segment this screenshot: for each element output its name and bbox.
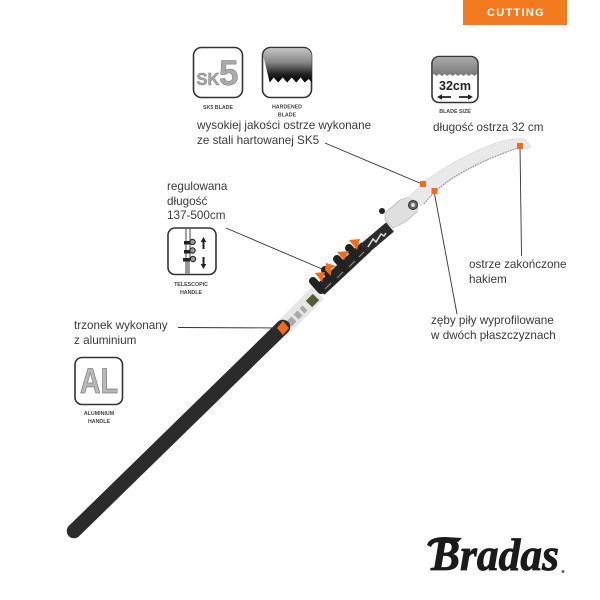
icon: hardened blade [262, 48, 312, 118]
leader: adjustable length [226, 228, 322, 269]
leader: aluminium shaft [178, 326, 283, 329]
icon: blade size: BLADE SIZE [439, 109, 471, 115]
text: SK5 blade description: wysokiej jakości ostrze wykonane [196, 119, 371, 132]
pruning saw [74, 139, 531, 531]
text: SK5 blade description: ze stali hartowanej SK5 [197, 134, 320, 147]
text: saw teeth: w dwóch płaszczyznach [430, 329, 556, 342]
logo: Bradas: Bradas [430, 529, 559, 580]
icon: SK5 blade [194, 48, 242, 111]
text: aluminium shaft: z aluminium [74, 334, 136, 347]
text: hooked tip: ostrze zakończone [469, 258, 566, 271]
black handle [74, 327, 283, 531]
text: aluminium shaft: trzonek wykonany [74, 319, 168, 332]
text: blade length: długość ostrza 32 cm [433, 121, 543, 134]
leader: SK5 blade [325, 143, 422, 184]
telescopic clamps [313, 239, 366, 290]
head bracket [385, 197, 418, 228]
upper tube [364, 227, 390, 249]
icon: SK5 blade: SK [196, 69, 220, 89]
icon: telescopic handle: TELESCOPIC [174, 282, 208, 288]
icon: hardened blade: BLADE [278, 112, 297, 118]
category tab: CUTTING [487, 7, 545, 19]
icon: hardened blade: HARDENED [272, 104, 302, 110]
text: saw teeth: zęby piły wyprofilowane [431, 314, 554, 327]
blade [408, 139, 531, 206]
icon: aluminium handle: HANDLE [88, 419, 110, 425]
orange markers [277, 143, 523, 335]
icon: telescopic handle: HANDLE [180, 290, 202, 296]
text: hooked tip: hakiem [469, 273, 507, 286]
leader: hook [520, 146, 522, 256]
leader: teeth [434, 191, 457, 314]
icon: aluminium handle [75, 358, 122, 425]
text: adjustable length: 137-500cm [167, 209, 225, 222]
icon: blade size [432, 56, 478, 115]
icon: aluminium handle: AL [80, 362, 118, 401]
icon: blade size: 32cm [439, 79, 471, 93]
text: adjustable length: długość [167, 195, 207, 208]
icon: aluminium handle: ALUMINIUM [84, 411, 115, 417]
icon: telescopic handle [168, 228, 216, 296]
icon: SK5 blade: 5 [219, 54, 238, 93]
silver section [281, 293, 318, 330]
icon: SK5 blade: SK5 BLADE [203, 105, 233, 111]
category tab [463, 0, 567, 25]
text: adjustable length: regulowana [167, 180, 228, 193]
